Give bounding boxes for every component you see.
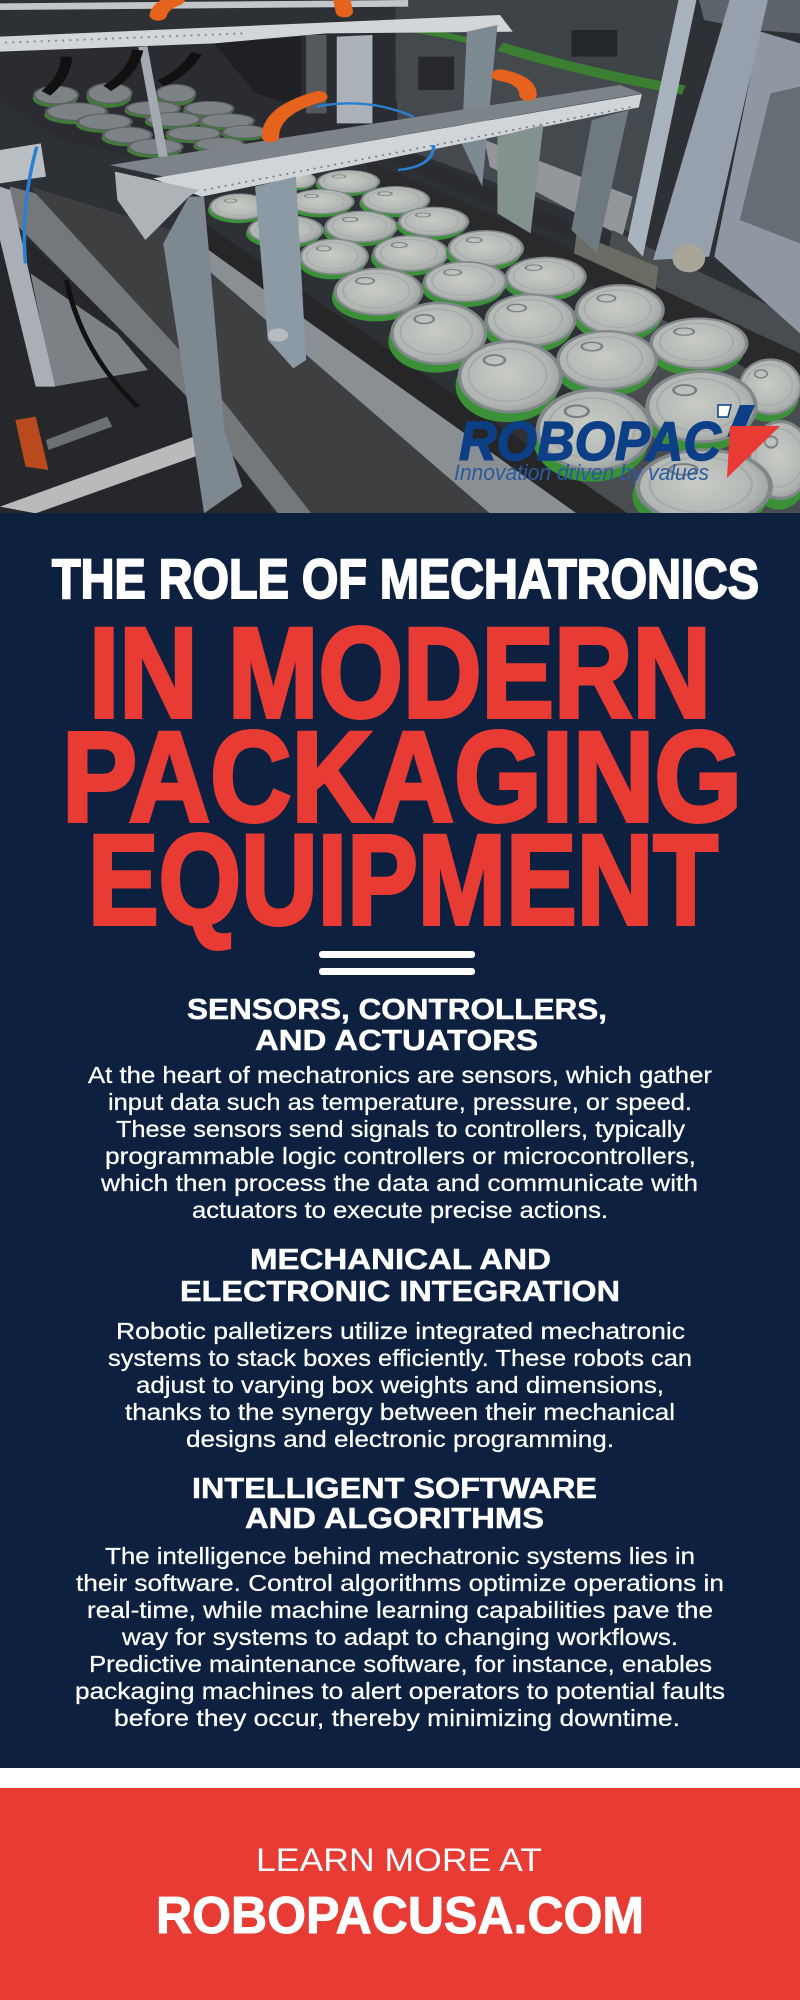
body text: software: before they occur, thereby minimizing downtime. — [114, 1705, 680, 1731]
body text: software: way for systems to adapt to changing workflows. — [121, 1624, 678, 1650]
panel: call to action footer — [0, 1788, 800, 2000]
logo: Robopac: ROBOPAC — [459, 410, 722, 472]
body text: sensors: actuators to execute precise actions. — [192, 1197, 608, 1223]
body text: software: real-time, while machine learning capabilities pave the — [87, 1597, 713, 1623]
body text: software: The intelligence behind mechatronic systems lies in — [105, 1543, 695, 1569]
logo: Robopac: Innovation driven by values — [454, 460, 709, 485]
body text: integration: Robotic palletizers utilize integrated mechatronic — [116, 1318, 685, 1344]
panel: hero photo of packaging line — [0, 0, 800, 534]
title line: in modern: IN MODERN — [89, 602, 711, 745]
heading: integration — [180, 1244, 620, 1308]
orange handles — [158, 0, 528, 137]
text: website: ROBOPACUSA.COM — [156, 1887, 644, 1945]
section: sensors, controllers, and actuators — [88, 994, 712, 1223]
heading: sensors: SENSORS, CONTROLLERS, — [187, 994, 607, 1026]
heading: integration: MECHANICAL AND — [250, 1244, 551, 1276]
body text: integration — [108, 1318, 692, 1452]
heading: sensors: AND ACTUATORS — [255, 1025, 538, 1057]
title — [52, 547, 759, 952]
body text: integration: adjust to varying box weights and dimensions, — [136, 1372, 664, 1398]
body text: sensors: At the heart of mechatronics are sensors, which gather — [88, 1062, 712, 1088]
gantry frame — [0, 0, 642, 513]
heading: integration: ELECTRONIC INTEGRATION — [180, 1276, 620, 1308]
background cans — [33, 83, 268, 158]
body text: sensors: These sensors send signals to controllers, typically — [116, 1116, 686, 1142]
heading: sensors — [187, 994, 607, 1057]
section: mechanical and electronic integration — [108, 1244, 692, 1452]
machine interior behind gantry — [214, 0, 686, 235]
lower floor and belt — [0, 143, 800, 513]
right frame and cabinet — [574, 0, 800, 333]
body text: software: Predictive maintenance software, for instance, enables — [89, 1651, 712, 1677]
body text: integration: designs and electronic programming. — [186, 1426, 614, 1452]
body text: software: packaging machines to alert operators to potential faults — [75, 1678, 725, 1704]
heading: software: INTELLIGENT SOFTWARE — [192, 1473, 597, 1505]
body text: sensors: programmable logic controllers or microcontrollers, — [105, 1143, 696, 1169]
section: intelligent software and algorithms — [75, 1473, 725, 1731]
cans on conveyor — [208, 170, 800, 534]
body text: sensors — [88, 1062, 712, 1223]
text: learn more at: LEARN MORE AT — [256, 1842, 542, 1878]
divider bars — [319, 951, 475, 975]
blue cables — [24, 103, 434, 263]
logo: Robopac — [454, 405, 780, 485]
heading: software: AND ALGORITHMS — [245, 1503, 544, 1535]
body text: software — [75, 1543, 725, 1731]
body text: sensors: input data such as temperature, pressure, or speed. — [108, 1089, 692, 1115]
body text: integration: thanks to the synergy between their mechanical — [125, 1399, 675, 1425]
body text: sensors: which then process the data and communicate with — [100, 1170, 698, 1196]
heading: software — [192, 1473, 597, 1535]
panel: navy content background — [0, 513, 800, 1768]
body text: integration: systems to stack boxes efficiently. These robots can — [108, 1345, 692, 1371]
body text: software: their software. Control algorithms optimize operations in — [76, 1570, 724, 1596]
